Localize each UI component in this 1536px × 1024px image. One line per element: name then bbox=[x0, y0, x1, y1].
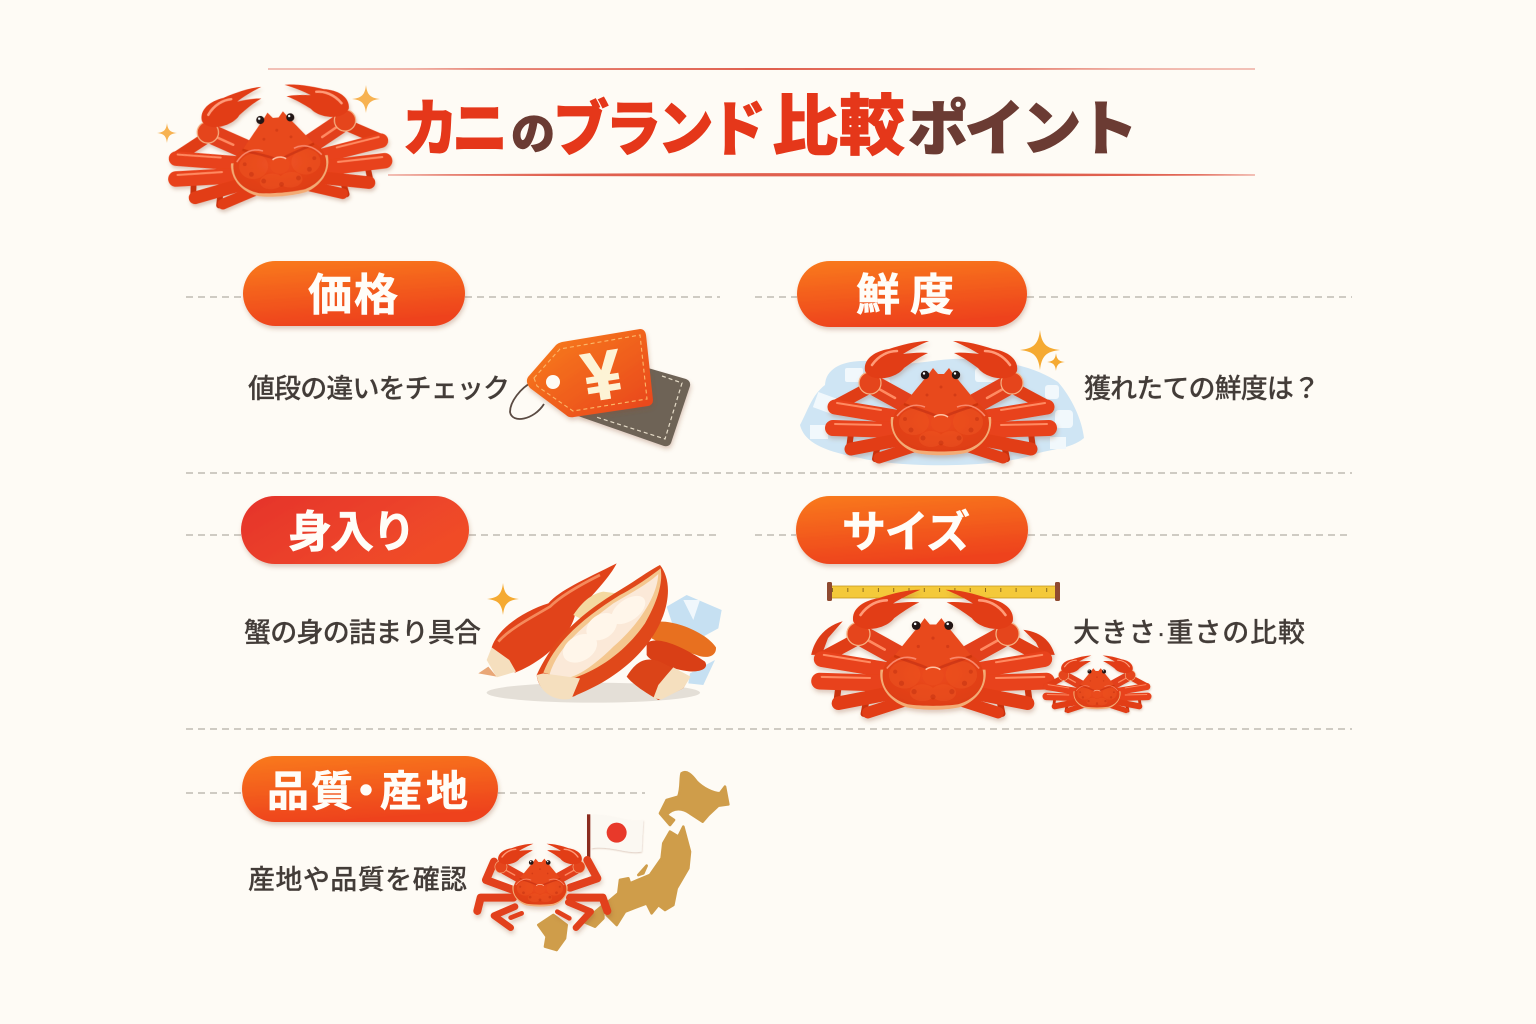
title: ポイント bbox=[908, 96, 1138, 163]
icon: small crab bbox=[1046, 656, 1148, 711]
panel: freshness bbox=[797, 261, 1320, 465]
text: origin description: 産地や品質を確認 bbox=[248, 865, 467, 895]
heading pill: meat fill: 身入り bbox=[288, 508, 416, 557]
header: title with crab bbox=[157, 68, 1255, 209]
heading pill: meat fill bbox=[241, 496, 469, 564]
panel: meat fill bbox=[241, 496, 722, 703]
heading pill: freshness: 鮮度 bbox=[856, 271, 954, 320]
icon: yen price tag bbox=[510, 329, 690, 446]
heading pill: size: サイズ bbox=[842, 508, 970, 557]
heading pill: size bbox=[796, 496, 1028, 564]
icon: crab on ice bbox=[800, 330, 1084, 465]
heading pill: freshness bbox=[797, 261, 1027, 327]
icon: header crab bbox=[169, 77, 387, 209]
icon: measuring tape bbox=[827, 582, 1060, 601]
title bottom rule bbox=[388, 174, 1255, 176]
text: meat fill description: 蟹の身の詰まり具合 bbox=[244, 618, 481, 648]
icon: Japanese flag bbox=[587, 814, 643, 858]
panel: size bbox=[796, 496, 1305, 714]
icon: crab with flag bbox=[477, 844, 607, 928]
heading pill: quality and origin: 品質 bbox=[267, 768, 353, 815]
icon: sparkle bbox=[487, 583, 519, 615]
title: の bbox=[511, 110, 555, 159]
title: 比較 bbox=[772, 89, 905, 163]
divider row lines bbox=[186, 297, 1352, 793]
title: カニ bbox=[402, 96, 508, 164]
text: price description: 値段の違いをチェック bbox=[248, 374, 510, 404]
text: freshness description: 獲れたての鮮度は？ bbox=[1084, 374, 1320, 404]
icon: header sparkle left bbox=[157, 123, 177, 143]
icon: Japan map bbox=[538, 772, 728, 950]
text: size description: 大きさ·重さの比較 bbox=[1073, 618, 1305, 648]
panel: quality and origin bbox=[242, 756, 728, 950]
panel: price bbox=[243, 261, 690, 446]
heading pill: quality and origin bbox=[242, 756, 498, 822]
icon: large crab bbox=[811, 590, 1055, 714]
icon: yen price tag: ¥ bbox=[578, 335, 627, 416]
icon: header sparkle right bbox=[352, 85, 380, 113]
heading pill: quality and origin: ・ bbox=[345, 768, 387, 815]
heading pill: quality and origin: 産地 bbox=[380, 768, 468, 815]
title: ブランド bbox=[553, 96, 766, 163]
title top rule bbox=[268, 68, 1255, 70]
heading pill: price bbox=[243, 261, 465, 326]
title bbox=[402, 89, 1138, 164]
icon: crab legs with meat bbox=[478, 563, 722, 703]
heading pill: price: 価格 bbox=[308, 271, 398, 320]
